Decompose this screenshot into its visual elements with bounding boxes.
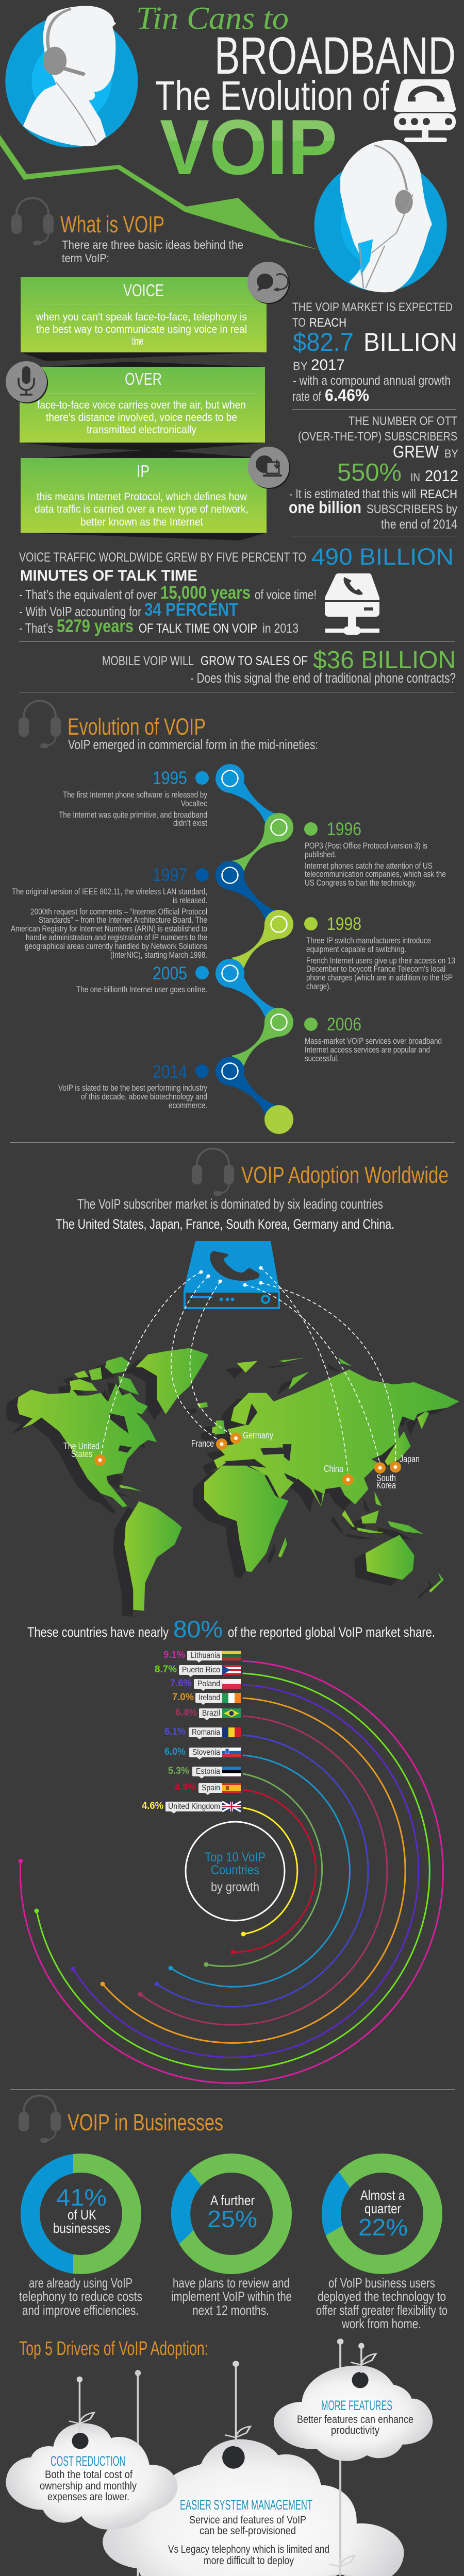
stat: mobile voip (102, 647, 456, 686)
stat: ott subscribers: BY (444, 447, 458, 460)
stat: ott subscribers: 2012 (425, 467, 458, 485)
donut: 22% (331, 2163, 433, 2265)
market share statement: 80% (173, 1616, 223, 1642)
stat: market value: 2017 (311, 357, 345, 374)
section: adoption worldwide (6, 1149, 459, 1642)
row: estonia: Estonia (196, 1767, 220, 1776)
cloud: more features: productivity (331, 2425, 379, 2436)
map labels: South (376, 1473, 396, 1483)
donut: 41%: 41% (56, 2184, 107, 2211)
panel: over: OVER (125, 369, 162, 388)
panel: over (6, 361, 266, 458)
title evolution: The Evolution of (155, 73, 390, 118)
map labels: China (324, 1464, 344, 1474)
center circle: Top 10 VoIP (205, 1850, 266, 1865)
row: spain: 4.9% (175, 1782, 196, 1793)
row: united kingdom: 4.6% (142, 1801, 163, 1811)
cloud: cost reduction: expenses are lower. (47, 2491, 129, 2503)
stat: voice traffic: of voice time! (255, 587, 317, 602)
panel: over: there’s distance involved, voice needs to be (46, 412, 237, 423)
timeline 2014: 2014 (153, 1062, 187, 1082)
icon: speech bubbles (247, 262, 290, 304)
timeline 1995: The Internet was quite primitive, and broadband (59, 810, 207, 820)
timeline 1996: Internet phones catch the attention of US (305, 861, 433, 871)
stat: market value: BY (293, 360, 308, 372)
agent circle left (5, 6, 138, 147)
panel: voice: time (132, 335, 143, 347)
icon: globe and laptop (248, 447, 290, 489)
section: voip in businesses (19, 2096, 448, 2331)
cloud: cost reduction: ownership and monthly (40, 2480, 137, 2492)
cloud: easier system management: can be self-provisioned (200, 2525, 296, 2537)
timeline 1998: equipment capable of switching. (306, 944, 406, 954)
icon: phone router (394, 79, 456, 142)
panel: ip: better known as the Internet (80, 516, 203, 528)
stat: ott subscribers: REACH (420, 487, 457, 501)
row: ireland (172, 1692, 241, 1705)
cloud: easier system management: more difficult to deploy (204, 2555, 294, 2567)
timeline 1997: handle administration and registration of IP numbers to the (26, 933, 207, 942)
stat: voice traffic (19, 544, 454, 636)
icon: server phone (325, 573, 379, 635)
cloud: more features: Better features can enhance (297, 2414, 413, 2426)
donut captions (19, 2275, 448, 2331)
stat: market value: rate of (292, 389, 321, 404)
stat: mobile voip: $36 BILLION (313, 647, 456, 674)
cloud: cost reduction: Both the total cost of (45, 2469, 132, 2481)
row: puerto rico: Puerto Rico (182, 1666, 220, 1674)
row: brazil: 6.4% (175, 1707, 197, 1718)
stat: market value: REACH (309, 316, 346, 330)
stat: mobile voip: GROW TO SALES OF (201, 654, 308, 668)
panel: voice: the best way to communicate using voice in real (36, 324, 247, 335)
map labels: Korea (376, 1480, 396, 1490)
stat: voice traffic: 15,000 years (160, 583, 251, 603)
panel: voice: VOICE (123, 281, 164, 300)
timeline 1996: published. (305, 850, 337, 859)
row: lithuania (163, 1650, 241, 1663)
donut: 41%: of UK (68, 2207, 96, 2223)
stat: voice traffic: MINUTES OF TALK TIME (20, 567, 197, 584)
row: united kingdom (142, 1801, 241, 1814)
stat: voice traffic: 490 BILLION (311, 544, 454, 570)
donut: 25%: A further (210, 2193, 255, 2208)
donut: 22%: 22% (358, 2214, 408, 2241)
map labels: The United (63, 1441, 100, 1451)
timeline 1997: is released. (173, 895, 207, 905)
row: estonia (168, 1766, 241, 1778)
stat: voice traffic: VOICE TRAFFIC WORLDWIDE GREW BY FIVE PERCENT TO (19, 550, 306, 565)
donut captions: and improve efficiencies. (22, 2302, 139, 2318)
timeline 1996 (304, 819, 446, 888)
row: poland: Poland (197, 1680, 220, 1688)
map labels: States (71, 1449, 92, 1459)
subheading: VoIP emerged in commercial form in the mid-nineties: (68, 737, 318, 752)
timeline 1995 (59, 768, 209, 828)
source dots (199, 1266, 263, 1287)
stat: market value: TO (292, 316, 306, 330)
map labels (63, 1430, 420, 1490)
donut captions: are already using VoIP (29, 2275, 132, 2291)
timeline 1995: The first Internet phone software is released by (63, 790, 207, 800)
title script: Tin Cans to (136, 1, 289, 36)
timeline 2014: ecommerce. (169, 1100, 207, 1110)
stat: market value (292, 300, 457, 404)
donut: 22%: quarter (364, 2201, 401, 2216)
row: puerto rico (155, 1664, 241, 1677)
intro text (62, 238, 243, 265)
row: slovenia: 6.0% (164, 1747, 186, 1757)
icon: headset (192, 1149, 234, 1196)
stat: voice traffic: in 2013 (262, 621, 299, 636)
timeline 2006 (304, 1014, 442, 1063)
agent circle right (314, 140, 447, 292)
timeline 1995: Vocaltec (181, 799, 207, 808)
stat: market value: $82.7 (293, 328, 354, 357)
panel: ip (21, 447, 290, 540)
timeline 1997: 1997 (153, 865, 187, 885)
timeline 1998: Three IP switch manufacturers introduce (306, 936, 431, 945)
map labels: France (191, 1438, 214, 1449)
row: romania (164, 1726, 241, 1739)
timeline 1997: (InterNIC), starting March 1998. (110, 950, 207, 960)
market share statement (27, 1616, 435, 1642)
section: evolution of voip (11, 701, 455, 1134)
timeline 1997 (11, 865, 209, 960)
connection lines (101, 1268, 395, 1475)
donut: 25% (180, 2163, 283, 2265)
growth arcs (20, 1661, 443, 2083)
header (0, 1, 456, 292)
donut: 22%: Almost a (360, 2188, 405, 2203)
panel: over: face-to-face voice carries over the air, but when (37, 399, 246, 411)
row: slovenia (164, 1747, 241, 1759)
timeline 1997: American Registry for Internet Numbers (ARIN) is established to (11, 924, 207, 934)
row: spain (175, 1782, 241, 1795)
timeline 2014: of this decade, above biotechnology and (81, 1092, 207, 1101)
panel: over: transmitted electronically (87, 424, 196, 436)
timeline 2014 (58, 1062, 209, 1110)
timeline 2006: Internet access services are popular and (305, 1045, 430, 1055)
donut captions: telephony to reduce costs (19, 2289, 142, 2304)
cloud: cost reduction: COST REDUCTION (51, 2453, 125, 2469)
intro text (56, 1196, 394, 1232)
timeline 2014: VoIP is slated to be the best performing industry (58, 1083, 207, 1093)
row: poland: 7.6% (170, 1678, 192, 1689)
cloud: easier system management: EASIER SYSTEM MANAGEMENT (180, 2497, 312, 2513)
stat: mobile voip: MOBILE VOIP WILL (102, 654, 194, 668)
timeline 2005 (76, 963, 209, 994)
stats: right column (289, 300, 458, 536)
panel: voice: when you can’t speak face-to-face, telephony is (36, 311, 247, 323)
section: top 5 drivers (6, 2338, 449, 2576)
row: ireland: Ireland (198, 1693, 220, 1702)
timeline 2006: 2006 (327, 1014, 361, 1035)
row: poland (170, 1678, 241, 1691)
center circle (186, 1822, 285, 1921)
heading: Evolution of VOIP (68, 714, 206, 740)
arc end dots (19, 1859, 245, 1997)
market share statement: These countries have nearly (27, 1624, 169, 1640)
timeline 2006: successful. (305, 1054, 339, 1063)
stat: voice traffic: 5279 years (57, 616, 134, 636)
cloud: easier system management: Service and features of VoIP (189, 2514, 306, 2526)
center circle: by growth (211, 1880, 259, 1894)
stat: voice traffic: - That’s the equivalent of over (19, 587, 157, 602)
timeline 1997: geographical areas currently handled by Network Solutions (25, 941, 207, 951)
timeline 1996: US Congress to ban the technology. (305, 878, 417, 888)
intro text: There are three basic ideas behind the (62, 238, 243, 251)
cloud: easier system management: Vs Legacy telephony which is limited and (168, 2544, 329, 2555)
timeline 1997: Standards” – from the Internet Architecture Board. The (39, 915, 207, 925)
timeline 2005: 2005 (153, 963, 187, 984)
intro text: term VoIP: (62, 251, 109, 265)
stat: market value: 6.46% (325, 386, 369, 404)
stat: ott subscribers: 550% (337, 459, 402, 486)
panel: ip: this means Internet Protocol, which defines how (37, 491, 247, 503)
row: ireland: 7.0% (172, 1692, 194, 1703)
timeline 1998 (304, 914, 455, 991)
row: romania: Romania (192, 1728, 220, 1737)
clouds (6, 2338, 449, 2576)
stat: voice traffic: - That’s (19, 620, 53, 636)
cloud: cost reduction (40, 2453, 137, 2503)
map labels: Germany (243, 1430, 273, 1440)
map pins (94, 1432, 401, 1485)
cloud: easier system management (168, 2497, 329, 2567)
stat: ott subscribers: GREW (393, 442, 439, 461)
world map (6, 1348, 459, 1617)
timeline 2005: The one-billionth Internet user goes online. (76, 985, 207, 994)
stat: market value: BILLION (363, 328, 457, 357)
stat: voice traffic: OF TALK TIME ON VOIP (139, 621, 257, 636)
chart: top 10 voip countries by growth (19, 1650, 443, 2083)
heading: What is VOIP (60, 211, 164, 238)
donut captions: work from home. (341, 2316, 421, 2331)
title voip: VOIP (160, 104, 337, 191)
timeline 1998: charge). (306, 981, 331, 991)
panel: ip: IP (137, 462, 150, 481)
row: brazil: Brazil (202, 1709, 220, 1718)
icon: headset (19, 701, 61, 748)
panel: ip: data traffic is carried over a new type of network, (35, 503, 248, 515)
donut: 25%: 25% (207, 2206, 257, 2232)
icon: headset (19, 2096, 61, 2143)
donut captions: implement VoIP within the (171, 2289, 292, 2304)
center circle: Countries (211, 1863, 259, 1877)
stat: ott subscribers: one billion (289, 498, 361, 517)
timeline 1997: 2000th request for comments – “Internet Official Protocol (30, 907, 207, 917)
row: lithuania: Lithuania (191, 1651, 220, 1660)
icon: headset (11, 198, 54, 245)
timeline 1996: 1996 (327, 819, 361, 839)
donut captions: next 12 months. (192, 2302, 269, 2318)
donut: 41% (30, 2163, 132, 2265)
row: united kingdom: United Kingdom (168, 1802, 220, 1811)
cloud: more features (297, 2398, 413, 2436)
row: spain: Spain (202, 1784, 220, 1792)
section: what is voip (6, 198, 290, 540)
timeline 1995: 1995 (153, 768, 187, 788)
heading: Top 5 Drivers of VoIP Adoption: (19, 2338, 208, 2360)
stat: voice traffic: 34 PERCENT (144, 600, 238, 620)
map labels: Japan (400, 1454, 420, 1464)
heading: VOIP in Businesses (68, 2109, 223, 2136)
icon: microphone (6, 361, 48, 403)
stat: ott subscribers (289, 414, 458, 532)
stat: ott subscribers: IN (410, 471, 420, 484)
row: romania: 6.1% (164, 1726, 186, 1737)
green trend line (0, 135, 319, 250)
timeline connector (216, 764, 293, 1134)
cloud: more features: MORE FEATURES (321, 2398, 392, 2413)
timeline 1997: The original version of IEEE 802.11, the wireless LAN standard, (12, 887, 207, 896)
device: phone server (184, 1241, 279, 1308)
row: slovenia: Slovenia (192, 1748, 220, 1757)
row: brazil (175, 1707, 241, 1720)
row: puerto rico: 8.7% (155, 1664, 177, 1675)
panel: voice (21, 262, 290, 361)
timeline 1996: POP3 (Post Office Protocol version 3) is (305, 841, 427, 851)
timeline 1998: 1998 (327, 914, 361, 934)
donut captions: have plans to review and (173, 2275, 290, 2291)
row: lithuania: 9.1% (163, 1650, 185, 1660)
timeline 1995: didn’t exist (173, 818, 207, 828)
donut: 41%: businesses (53, 2221, 110, 2236)
stat: ott subscribers: - It is estimated that this will (289, 487, 416, 501)
stat: voice traffic: - With VoIP accounting for (19, 604, 141, 619)
donut captions: of VoIP business users (328, 2275, 435, 2291)
row: estonia: 5.3% (168, 1766, 189, 1776)
